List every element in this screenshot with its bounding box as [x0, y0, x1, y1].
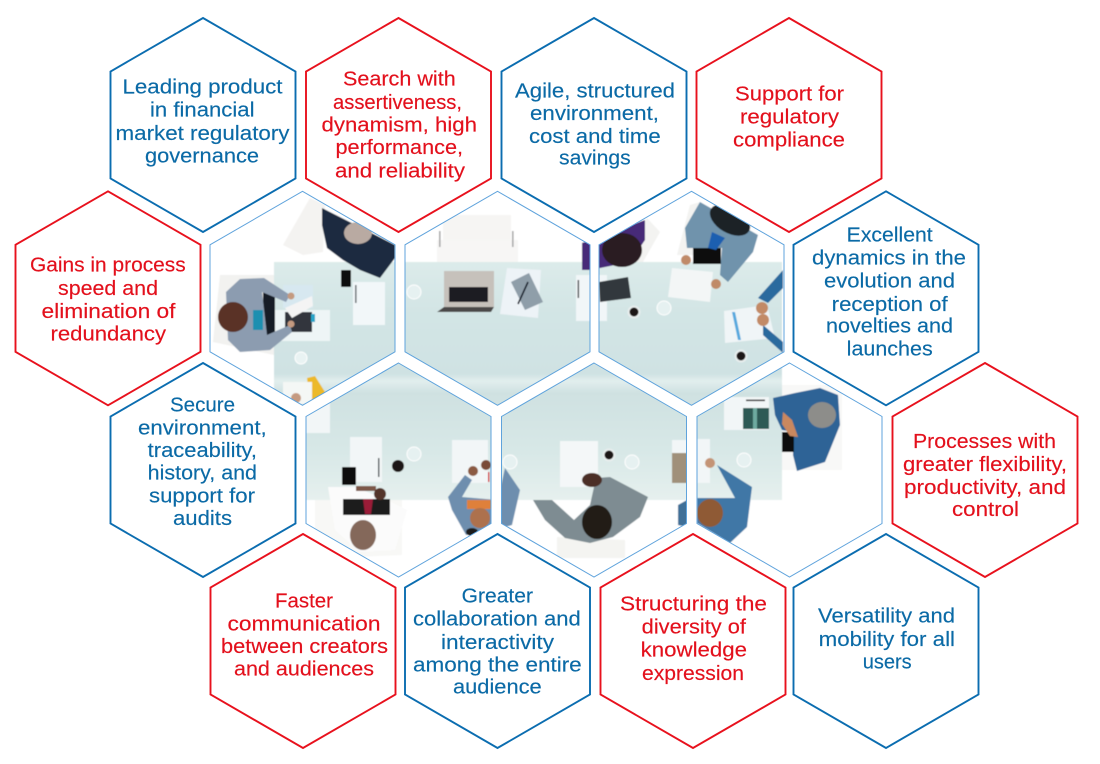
hexagon: Secure environment: environment,: [138, 418, 267, 440]
hexagon: Agile, structured environment: [502, 18, 686, 232]
hexagon: Faster communication: between creators: [221, 636, 388, 658]
hexagon: Agile, structured environment: Agile, structured: [515, 80, 675, 102]
hexagon: Leading product: Leading product: [122, 76, 283, 98]
hexagon: Processes with greater flexibility: productivity, and: [904, 477, 1066, 499]
hexagon: Gains in process speed: Gains in process: [30, 255, 186, 277]
hexagon: Excellent dynamics: evolution and: [824, 271, 955, 293]
photo hexagon: man in white shirt and woman: [306, 362, 492, 578]
photo hexagon: woman and man at table: [210, 190, 396, 406]
hexagon: Structuring the diversity: knowledge: [641, 640, 747, 662]
hexagon: Search with assertiveness: assertiveness,: [333, 92, 462, 114]
hexagon: Excellent dynamics: [794, 191, 978, 405]
hexagon: Versatility and mobility: Versatility and: [818, 606, 955, 628]
hexagon: Greater collaboration: audience: [453, 676, 542, 698]
hexagon: Versatility and mobility: [794, 534, 978, 748]
hexagon: Processes with greater flexibility: Processes with: [913, 431, 1056, 453]
hexagon: Greater collaboration: collaboration and: [413, 609, 581, 631]
hexagon: Leading product: governance: [145, 146, 259, 168]
hexagon: Faster communication: [210, 534, 396, 748]
hexagon: Excellent dynamics: Excellent: [847, 225, 933, 247]
hexagon: Agile, structured environment: savings: [559, 148, 631, 170]
hexagon: Search with assertiveness: [306, 18, 491, 232]
hexagon: Structuring the diversity: Structuring the: [620, 594, 767, 616]
hexagon: Support for regulatory compliance: compliance: [733, 130, 845, 152]
hexagon: Leading product: market regulatory: [116, 123, 290, 145]
hexagon: Leading product: in financial: [150, 100, 254, 122]
hexagon: Greater collaboration: interactivity: [441, 632, 554, 654]
hexagon: Search with assertiveness: dynamism, high: [322, 115, 477, 137]
hexagon: Support for regulatory compliance: regulatory: [740, 106, 839, 128]
hexagon: Greater collaboration: among the entire: [413, 655, 582, 677]
hexagon: Versatility and mobility: users: [863, 652, 912, 674]
hexagon: Gains in process speed: [16, 191, 200, 405]
hexagon: Secure environment: [110, 363, 296, 577]
hexagon: Leading product: [110, 18, 296, 232]
photo hexagon: laptop and notebook: [404, 190, 590, 406]
hexagon: Versatility and mobility: mobility for all: [819, 629, 955, 651]
hexagon: Greater collaboration: [405, 534, 590, 748]
hexagon: Support for regulatory compliance: [696, 18, 882, 232]
hexagon: Gains in process speed: speed and: [58, 278, 158, 300]
hexagon: Agile, structured environment: environment,: [530, 103, 659, 125]
hexagon: Structuring the diversity: [600, 534, 786, 748]
hexagon: Search with assertiveness: Search with: [343, 69, 456, 91]
hexagon: Support for regulatory compliance: Support for: [735, 84, 844, 106]
hexagon: Excellent dynamics: novelties and: [826, 316, 953, 338]
hexagon: Faster communication: and audiences: [234, 659, 374, 681]
hexagon: Secure environment: Secure: [170, 395, 235, 417]
hexagon: Excellent dynamics: dynamics in the: [812, 248, 966, 270]
hexagon: Processes with greater flexibility: control: [952, 499, 1019, 521]
hexagon: Secure environment: history, and: [148, 462, 257, 484]
hexagon: Excellent dynamics: launches: [847, 339, 933, 361]
photo hexagon: two men in blue: [696, 362, 882, 578]
hexagon: Search with assertiveness: performance,: [336, 137, 463, 159]
hexagon: Gains in process speed: elimination of: [42, 301, 176, 323]
photo hexagon: man in grey sweater: [501, 362, 687, 578]
hexagon: Processes with greater flexibility: [892, 363, 1078, 577]
hexagon: Secure environment: traceability,: [148, 440, 257, 462]
hexagon: Structuring the diversity: expression: [642, 663, 744, 685]
hexagon: Search with assertiveness: and reliability: [335, 161, 465, 183]
hexagon: Faster communication: Faster: [275, 590, 333, 612]
hexagon: Excellent dynamics: reception of: [832, 294, 948, 316]
hexagon: Processes with greater flexibility: greater flexibility,: [903, 454, 1067, 476]
hexagon: Greater collaboration: Greater: [462, 586, 533, 608]
hexagon: Agile, structured environment: cost and time: [529, 126, 661, 148]
hexagon: Structuring the diversity: diversity of: [642, 616, 746, 638]
hexagon: Secure environment: audits: [173, 508, 232, 530]
hexagon: Faster communication: communication: [228, 614, 380, 636]
hexagon: Secure environment: support for: [149, 486, 255, 508]
photo hexagon: colleagues with book and tablet: [598, 190, 784, 406]
hexagon: Gains in process speed: redundancy: [50, 324, 166, 346]
